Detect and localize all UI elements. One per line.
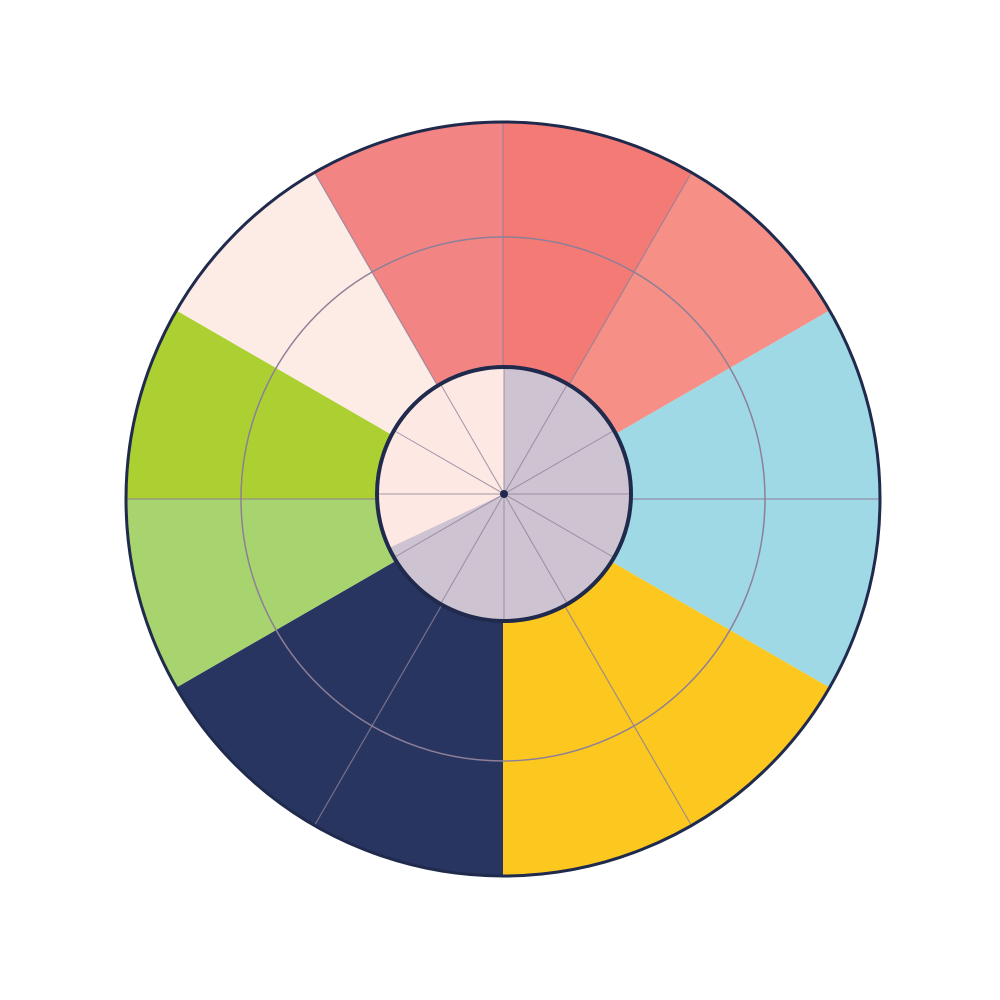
radial lines [126, 122, 880, 826]
segment: green lower [82, 336, 503, 688]
segment: yellow [340, 499, 829, 970]
segment: green upper [126, 310, 503, 499]
segment: navy [176, 499, 503, 876]
segment: red right [503, 122, 692, 499]
segment: red left [314, 78, 666, 499]
segment: light blue [503, 310, 993, 782]
segment: pale pink [177, 147, 597, 499]
inner disc [377, 367, 631, 621]
middle ring [241, 237, 765, 761]
segment: salmon [503, 173, 855, 593]
outer border [126, 122, 880, 876]
